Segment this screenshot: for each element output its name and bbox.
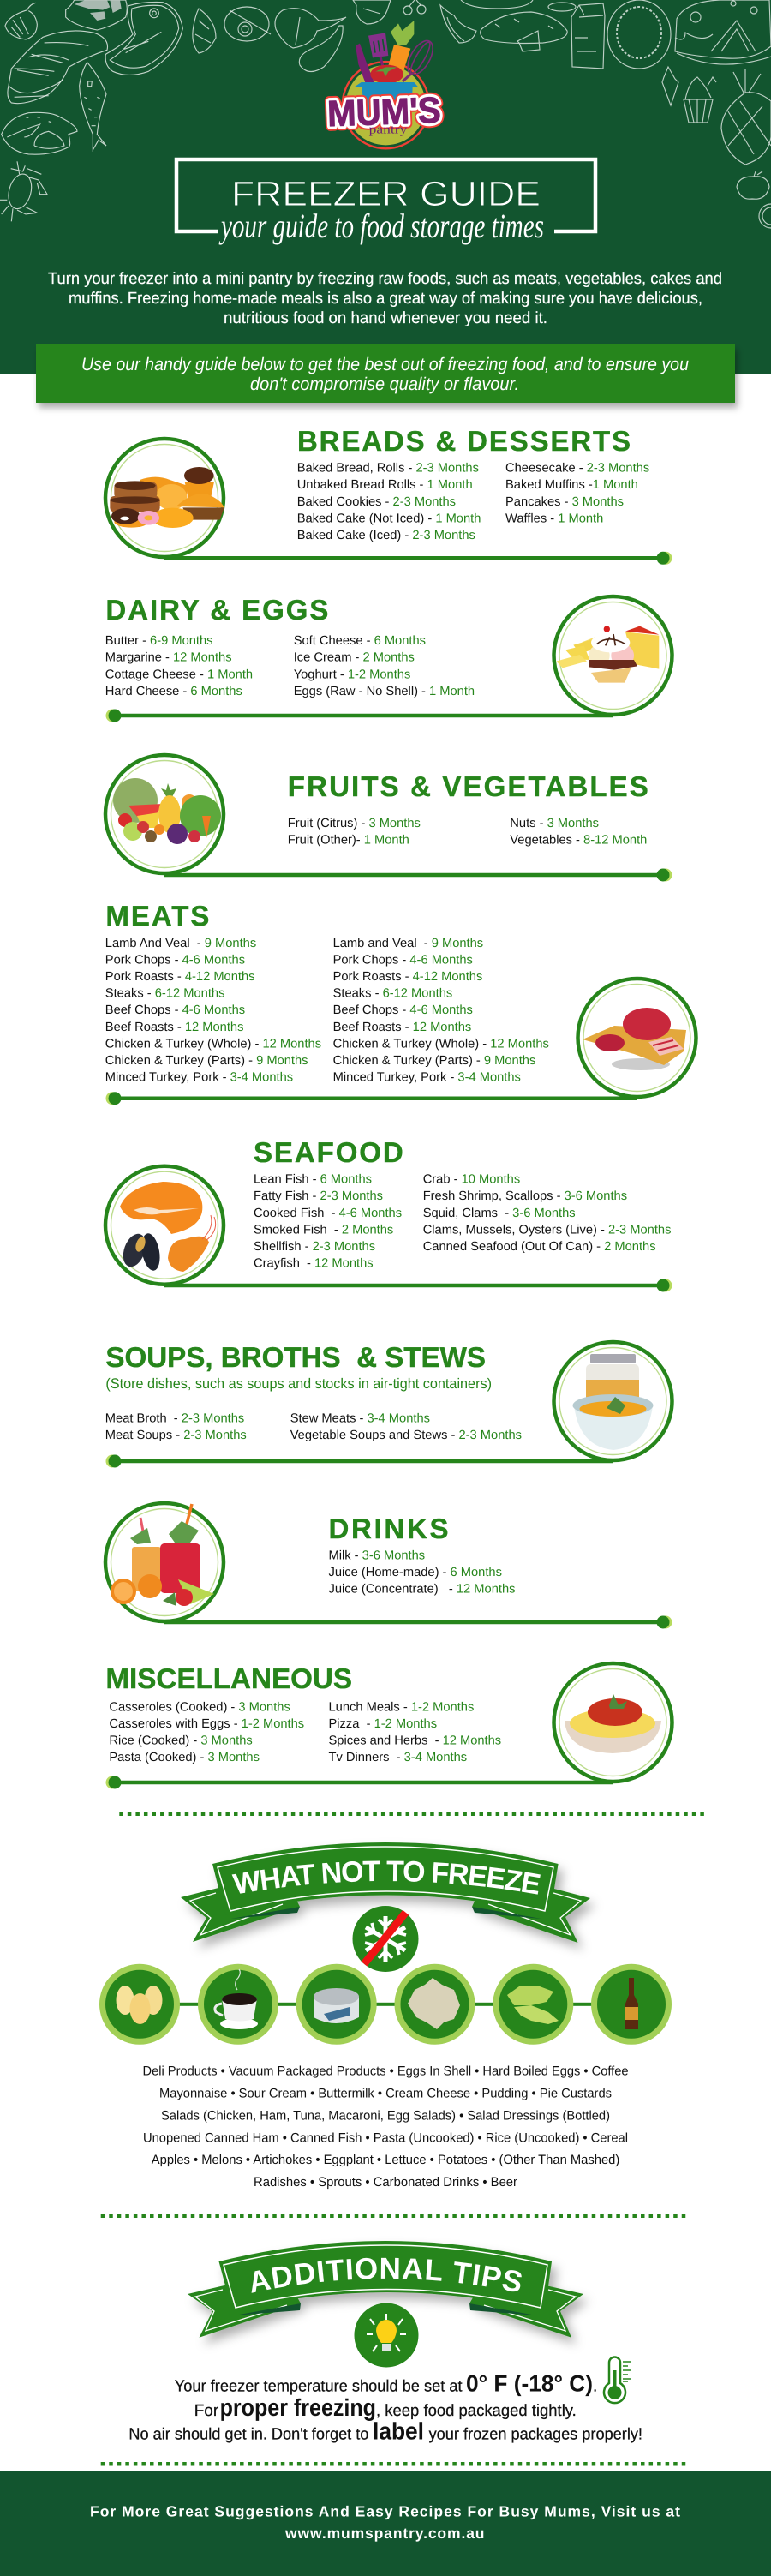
tip text: 0° F (-18° C): [466, 2371, 593, 2397]
icon: juice jars: [111, 1504, 214, 1606]
tip text: label: [373, 2418, 424, 2445]
storage list: Soft Cheese - 6 Months: [294, 634, 426, 648]
section frame: [105, 1503, 672, 1628]
storage list: Baked Cake (Not Iced) - 1 Month: [297, 512, 481, 525]
list of foods: Salads (Chicken, Ham, Tuna, Macaroni, Egg Salads) • Salad Dressings (Bottled): [161, 2108, 610, 2124]
heading: SEAFOOD: [254, 1136, 403, 1168]
panel: seafood: [105, 1136, 672, 1292]
storage list: Smoked Fish - 2 Months: [254, 1223, 393, 1237]
tip text: .: [593, 2378, 597, 2396]
intro text: [48, 270, 722, 327]
heading: DAIRY & EGGS: [105, 594, 328, 626]
ribbon heading: ADDITIONAL TIPS: [252, 2257, 522, 2293]
storage list: Steaks - 6-12 Months: [105, 987, 224, 1001]
panel: dairy and eggs: [105, 594, 672, 722]
storage list: Tv Dinners - 3-4 Months: [329, 1751, 467, 1764]
storage list: Crab - 10 Months: [423, 1173, 520, 1187]
logo wordmark: MUM'S: [326, 89, 441, 135]
storage list: Fruit (Other)- 1 Month: [288, 833, 409, 847]
rolling pin: [356, 44, 375, 87]
storage list: Pork Chops - 4-6 Months: [105, 953, 245, 967]
panel: fruits and vegetables: [105, 755, 672, 881]
icon row: [103, 1967, 668, 2041]
callout banner: [36, 344, 735, 403]
tip text: No air should get in. Don't forget to: [128, 2426, 368, 2444]
storage list: Pork Chops - 4-6 Months: [333, 953, 473, 967]
storage list: Casseroles with Eggs - 1-2 Months: [109, 1717, 304, 1731]
storage list: Lunch Meals - 1-2 Months: [329, 1700, 474, 1714]
tomato: [370, 65, 403, 84]
storage list: Canned Seafood (Out Of Can) - 2 Months: [423, 1240, 656, 1254]
spatula: [368, 33, 388, 71]
whisk: [403, 37, 438, 81]
header panel: [0, 0, 771, 374]
intro text: muffins. Freezing home-made meals is also a great way of making sure you have delicious,: [69, 290, 702, 308]
intro text: Turn your freezer into a mini pantry by freezing raw foods, such as meats, vegetables, cakes and: [48, 270, 722, 288]
heading: FRUITS & VEGETABLES: [288, 770, 648, 802]
storage list: Minced Turkey, Pork - 3-4 Months: [105, 1070, 293, 1084]
tip text: For: [194, 2402, 219, 2420]
storage list: Baked Bread, Rolls - 2-3 Months: [297, 462, 479, 476]
title box: [176, 159, 595, 231]
storage list: Clams, Mussels, Oysters (Live) - 2-3 Months: [423, 1223, 671, 1237]
storage list: Nuts - 3 Months: [510, 817, 599, 830]
storage list: Yoghurt - 1-2 Months: [294, 668, 410, 681]
panel: drinks: [105, 1503, 672, 1628]
storage list: [329, 1549, 515, 1596]
storage list: Stew Meats - 3-4 Months: [290, 1412, 430, 1426]
storage list: Cooked Fish - 4-6 Months: [254, 1207, 402, 1220]
storage list: [105, 634, 475, 698]
section frame: [106, 1663, 672, 1789]
ribbon heading: WHAT NOT TO FREEZE: [231, 1861, 541, 1895]
list of foods: Deli Products • Vacuum Packaged Products • Eggs In Shell • Hard Boiled Eggs • Coffee: [142, 2064, 629, 2079]
icon: thermometer: [604, 2357, 631, 2403]
section frame: [106, 1342, 672, 1467]
footer panel: For More Great Suggestions And Easy Recipes For Busy Mums, Visit us at: [90, 2503, 680, 2520]
storage list: Casseroles (Cooked) - 3 Months: [109, 1700, 290, 1714]
tip text: , keep food packaged tightly.: [376, 2402, 577, 2420]
section frame: [105, 439, 672, 565]
panel: soups, broths and stews: [105, 1341, 672, 1467]
icon: breads: [110, 467, 224, 528]
food doodles right: [193, 0, 771, 228]
list of foods: Mayonnaise • Sour Cream • Buttermilk • Cream Cheese • Pudding • Pie Custards: [159, 2087, 612, 2101]
tip text: your frozen packages properly!: [429, 2426, 642, 2444]
intro text: nutritious food on hand whenever you need it.: [224, 309, 547, 327]
tip text: Your freezer temperature should be set at: [175, 2378, 463, 2396]
storage list: Pork Roasts - 4-12 Months: [105, 970, 255, 984]
icon: beer bottle: [595, 1967, 668, 2041]
icon: rice: [397, 1967, 472, 2041]
storage list: Chicken & Turkey (Whole) - 12 Months: [105, 1037, 321, 1051]
storage list: Shellfish - 2-3 Months: [254, 1240, 375, 1254]
storage list: Vegetable Soups and Stews - 2-3 Months: [290, 1429, 522, 1442]
storage list: Fruit (Citrus) - 3 Months: [288, 817, 421, 830]
icon: fruit pile: [113, 778, 221, 844]
section frame: [105, 755, 672, 881]
storage list: Margarine - 12 Months: [105, 651, 232, 665]
storage list: Juice (Concentrate) - 12 Months: [329, 1582, 515, 1596]
storage list: Juice (Home-made) - 6 Months: [329, 1566, 502, 1579]
icon: seafood: [119, 1182, 216, 1272]
heading: DRINKS: [329, 1513, 449, 1544]
list of foods: Unopened Canned Ham • Canned Fish • Pasta (Uncooked) • Rice (Uncooked) • Cereal: [143, 2130, 628, 2145]
icon: lettuce: [496, 1967, 571, 2041]
logo: [326, 21, 441, 148]
list of foods: [142, 2064, 629, 2190]
icon: coffee: [200, 1967, 276, 2041]
callout banner: Use our handy guide below to get the best out of freezing food, and to ensure you: [81, 355, 689, 374]
storage list: Lean Fish - 6 Months: [254, 1173, 372, 1187]
logo pantry text: pantry: [369, 123, 407, 136]
storage list: Beef Roasts - 12 Months: [105, 1021, 243, 1034]
storage list: Cheesecake - 2-3 Months: [505, 462, 649, 476]
logo wordmark: MUM'S: [326, 89, 441, 135]
panel: miscellaneous: [105, 1662, 672, 1789]
storage list: Minced Turkey, Pork - 3-4 Months: [333, 1070, 521, 1084]
icon: eggs: [103, 1967, 176, 2041]
pot: [354, 82, 418, 117]
icon: soup jar and bowl: [572, 1354, 653, 1450]
carrot: [388, 21, 414, 79]
storage list: Pasta (Cooked) - 3 Months: [109, 1751, 260, 1764]
list of foods: Apples • Melons • Artichokes • Eggplant • Lettuce • Potatoes • (Other Than Mashed): [152, 2153, 619, 2167]
icon: canned fish: [299, 1967, 374, 2041]
storage list: Hard Cheese - 6 Months: [105, 685, 242, 698]
storage list: [105, 937, 549, 1084]
storage list: [105, 1412, 522, 1442]
heading: MEATS: [105, 900, 209, 932]
storage list: [254, 1173, 671, 1270]
storage list: Vegetables - 8-12 Month: [510, 833, 647, 847]
heading: BREADS & DESSERTS: [297, 425, 631, 457]
panel: meats: [105, 900, 696, 1105]
section frame: [106, 596, 672, 722]
storage list: Fatty Fish - 2-3 Months: [254, 1189, 383, 1203]
food doodles left: [0, 0, 182, 221]
storage list: Ice Cream - 2 Months: [294, 651, 415, 665]
storage list: Fresh Shrimp, Scallops - 3-6 Months: [423, 1189, 627, 1203]
storage list: Baked Cake (Iced) - 2-3 Months: [297, 529, 475, 542]
storage list: Beef Chops - 4-6 Months: [333, 1003, 473, 1017]
logo wordmark: MUM'S: [326, 89, 441, 135]
storage list: Spices and Herbs - 12 Months: [329, 1734, 501, 1748]
storage list: Pancakes - 3 Months: [505, 495, 624, 509]
storage list: Meat Soups - 2-3 Months: [105, 1429, 247, 1442]
storage list: Squid, Clams - 3-6 Months: [423, 1207, 576, 1220]
storage list: Steaks - 6-12 Months: [333, 987, 452, 1001]
callout banner: don't compromise quality or flavour.: [250, 374, 519, 394]
storage list: Chicken & Turkey (Whole) - 12 Months: [333, 1037, 549, 1051]
storage list: Pork Roasts - 4-12 Months: [333, 970, 482, 984]
storage list: Baked Muffins -1 Month: [505, 478, 638, 492]
icon: no freezing: [353, 1906, 418, 1972]
icon: meat on board: [583, 1008, 686, 1070]
storage list: Rice (Cooked) - 3 Months: [109, 1734, 253, 1748]
storage list: [109, 1700, 501, 1764]
storage list: Waffles - 1 Month: [505, 512, 603, 525]
storage list: Crayfish - 12 Months: [254, 1256, 374, 1270]
storage list: Beef Chops - 4-6 Months: [105, 1003, 245, 1017]
storage list: Chicken & Turkey (Parts) - 9 Months: [105, 1054, 308, 1068]
logo ring: [343, 62, 429, 148]
storage list: Eggs (Raw - No Shell) - 1 Month: [294, 685, 475, 698]
subheading: (Store dishes, such as soups and stocks in air-tight containers): [105, 1375, 492, 1392]
heading: MISCELLANEOUS: [105, 1662, 352, 1694]
storage list: Meat Broth - 2-3 Months: [105, 1412, 244, 1426]
ribbon: [188, 2241, 589, 2348]
title: FREEZER GUIDE: [231, 174, 541, 213]
subtitle: your guide to food storage times: [218, 207, 544, 245]
ribbon: [181, 1842, 596, 1952]
panel: breads and desserts: [105, 425, 672, 565]
storage list: Baked Cookies - 2-3 Months: [297, 495, 456, 509]
storage list: [288, 817, 647, 847]
storage list: [297, 462, 649, 542]
storage list: Lamb And Veal - 9 Months: [105, 937, 256, 950]
storage list: Chicken & Turkey (Parts) - 9 Months: [333, 1054, 535, 1068]
storage list: Beef Roasts - 12 Months: [333, 1021, 471, 1034]
icon: light bulb: [355, 2303, 418, 2367]
section frame: [105, 1166, 672, 1292]
list of foods: Radishes • Sprouts • Carbonated Drinks • Beer: [254, 2175, 517, 2190]
footer panel: [0, 2471, 771, 2576]
footer panel: www.mumspantry.com.au: [284, 2525, 485, 2542]
storage list: Butter - 6-9 Months: [105, 634, 213, 648]
tip text: [128, 2371, 642, 2445]
storage list: Unbaked Bread Rolls - 1 Month: [297, 478, 473, 492]
storage list: Cottage Cheese - 1 Month: [105, 668, 253, 681]
storage list: Milk - 3-6 Months: [329, 1549, 425, 1562]
storage list: Lamb and Veal - 9 Months: [333, 937, 483, 950]
panel: additional tips: [128, 2241, 642, 2445]
icon: spaghetti bowl: [565, 1694, 661, 1753]
section frame: [106, 979, 696, 1105]
heading: SOUPS, BROTHS & STEWS: [105, 1341, 486, 1373]
panel: what not to freeze: [99, 1842, 672, 2190]
icon: ice cream and cheese: [556, 626, 659, 683]
tip text: proper freezing: [220, 2394, 376, 2421]
storage list: Pizza - 1-2 Months: [329, 1717, 437, 1731]
